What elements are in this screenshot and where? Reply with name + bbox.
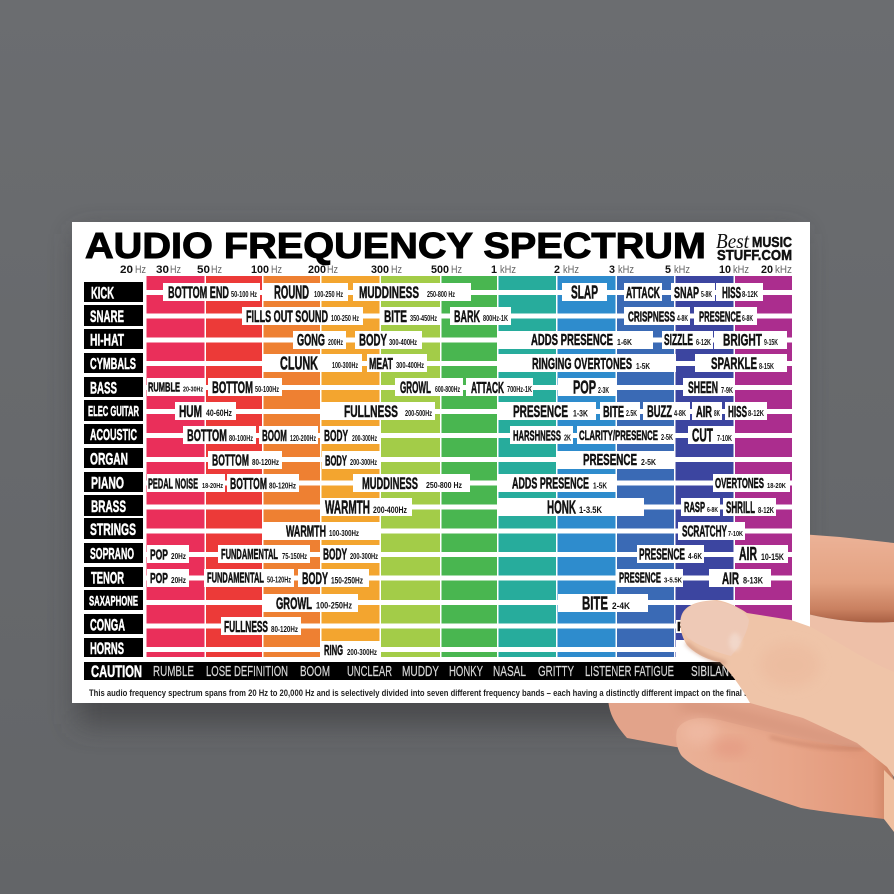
row: acoustic: 80-100Hz (229, 434, 253, 443)
row: conga: F (677, 619, 685, 634)
row: acoustic: BOOM (262, 428, 287, 445)
row: acoustic: BOTTOM (187, 426, 227, 445)
row: bass: RUMBLE (148, 380, 180, 394)
row: brass: WARMTH (325, 498, 370, 518)
row: tenor: 8-13K (743, 576, 763, 586)
row: electric guitar: 1-3K (573, 408, 588, 418)
row: acoustic: CLARITY/PRESENCE (579, 427, 658, 443)
row: brass: SHRILL (726, 498, 755, 517)
row: kick: 5-8K (701, 290, 712, 299)
row: kick: ATTACK (626, 285, 660, 302)
frequency axis labels: 100 (251, 264, 269, 276)
frequency axis labels: Hz (211, 264, 222, 276)
frequency axis labels: Hz (451, 264, 462, 276)
row: soprano: 75-150Hz (282, 552, 307, 561)
instrument labels: ACOUSTIC (90, 427, 137, 444)
instrument labels: KICK (91, 284, 114, 302)
row: cymbals: 300-400Hz (396, 361, 424, 370)
row: organ: BOTTOM (212, 452, 249, 470)
row: horns: RING (324, 642, 343, 659)
index finger behind (608, 695, 870, 770)
row: snare: BITE (384, 307, 407, 326)
row: conga (221, 617, 716, 636)
row: electric guitar: HISS (728, 404, 747, 421)
row: tenor (147, 569, 771, 588)
row: snare: 800Hz-1K (483, 314, 508, 323)
row: snare: PRESENCE (699, 308, 741, 326)
row: soprano: 200-300Hz (350, 552, 378, 561)
frequency axis labels: 5 (665, 264, 671, 276)
row: electric guitar: 4-8K (674, 409, 686, 418)
instrument labels: BASS (90, 378, 117, 398)
row: electric guitar: BUZZ (647, 402, 672, 421)
row: cymbals: 1-5K (636, 361, 651, 371)
row: brass: 6-8K (707, 505, 718, 514)
frequency axis labels: kHz (618, 264, 634, 276)
title: AUDIO FREQUENCY SPECTRUM (85, 225, 706, 266)
row: snare: 100-250 Hz (331, 314, 359, 323)
row: piano: 18-20K (767, 481, 786, 490)
row: soprano: PRESENCE (639, 546, 685, 564)
card (72, 222, 810, 703)
row: electric guitar: HUM (179, 402, 202, 421)
frequency axis labels: kHz (563, 264, 579, 276)
frequency axis labels: kHz (733, 264, 749, 276)
row: organ: 80-120Hz (252, 458, 279, 467)
row: soprano: FUNDAMENTAL (221, 546, 278, 563)
instrument labels: ELEC GUITAR (88, 404, 139, 420)
row: strings: WARMTH (286, 524, 326, 540)
row: saxaphone: 2-4K (612, 601, 630, 612)
row: hi-hat: 1-6K (617, 337, 633, 347)
row: piano: BOTTOM (230, 476, 267, 493)
row: acoustic: BODY (324, 428, 348, 445)
row: piano: 18-20Hz (202, 483, 223, 490)
row: electric guitar (175, 402, 767, 421)
row: bass: SHEEN (688, 378, 718, 397)
row: soprano: 20Hz (171, 552, 186, 561)
row: tenor: AIR (722, 569, 739, 588)
row: kick: MUDDINESS (359, 283, 419, 302)
row: electric guitar: 8-12K (748, 409, 764, 418)
row: brass: 200-400Hz (373, 505, 407, 515)
lower finger (676, 718, 894, 830)
row: piano: PEDAL NOISE (148, 476, 198, 492)
frequency axis labels: 20 (761, 264, 773, 276)
row: soprano: POP (150, 546, 168, 564)
row: bass: 2-3K (598, 386, 609, 395)
row: acoustic: HARSHNESS (513, 428, 561, 444)
caution bar: UNCLEAR (347, 663, 392, 680)
row: snare: 4-8K (677, 314, 688, 323)
row: organ: BODY (325, 452, 347, 470)
row: electric guitar: 2.5K (626, 409, 637, 418)
row: acoustic: 2-5K (661, 433, 673, 442)
caution bar: GRITTY (538, 663, 574, 680)
row: hi-hat: SIZZLE (664, 332, 693, 349)
caution bar: LOSE DEFINITION (206, 663, 288, 680)
spectrum colour bands (146, 276, 792, 657)
row: electric guitar: 8K (714, 409, 720, 418)
row: electric guitar: FULLNESS (344, 402, 398, 421)
row: tenor: POP (150, 570, 168, 587)
row: acoustic: CUT (692, 426, 713, 446)
instrument labels: TENOR (91, 568, 124, 588)
caution bar: LISTENER FATIGUE (585, 663, 674, 680)
row: cymbals: MEAT (369, 356, 393, 373)
frequency axis labels: 50 (197, 264, 210, 276)
row: electric guitar: BITE (603, 404, 624, 421)
instrument labels: SAXAPHONE (89, 592, 138, 608)
row: strings: 7-10K (728, 529, 743, 538)
row: kick: HISS (722, 285, 741, 302)
frequency axis labels: Hz (391, 264, 402, 276)
caution bar: CAUTION (91, 662, 142, 681)
instrument labels (84, 282, 143, 658)
frequency axis labels: kHz (775, 264, 792, 276)
row: piano: 250-800 Hz (426, 481, 462, 490)
row: bass (147, 378, 735, 398)
frequency axis labels: 1 (491, 264, 497, 276)
second finger top (800, 612, 894, 700)
hand behind the card (608, 534, 894, 832)
row: soprano: AIR (739, 544, 757, 564)
row: hi-hat (293, 330, 787, 350)
frequency axis labels: 30 (156, 264, 169, 276)
row: snare: 350-450Hz (410, 314, 437, 323)
caution bar: BOOM (300, 663, 330, 680)
row: organ: PRESENCE (583, 452, 637, 469)
frequency axis labels: Hz (271, 264, 282, 276)
caution bar: NASAL (493, 663, 526, 680)
row: horns: 200-300Hz (347, 648, 377, 657)
row: kick: 250-800 Hz (427, 290, 455, 299)
instrument labels: PIANO (91, 474, 124, 492)
row: hi-hat: 6-12K (696, 338, 711, 347)
row: hi-hat: 200Hz (328, 338, 343, 347)
row: strings: 100-300Hz (329, 529, 359, 538)
row: snare: FILLS OUT SOUND (246, 307, 328, 326)
row: kick: 50-100 Hz (231, 290, 257, 299)
frequency axis labels: Hz (170, 264, 181, 276)
row: piano: ADDS PRESENCE (512, 476, 589, 492)
row: piano: MUDDINESS (362, 474, 418, 493)
footnote: This audio frequency spectrum spans from 20 Hz to 20,000 Hz and is selectively divided into seven different frequency bands – each having a distinctly different impact on the final sound (89, 688, 767, 698)
instrument labels: CONGA (90, 616, 125, 634)
thumb over the card (680, 600, 894, 777)
instrument labels: SOPRANO (90, 546, 134, 563)
frequency axis labels: 2 (554, 264, 560, 276)
row: acoustic: 2K (564, 434, 571, 442)
frequency axis labels: Hz (135, 264, 146, 276)
row: acoustic: 120-200Hz (290, 434, 316, 443)
row: soprano: 10-15K (761, 552, 784, 562)
row: piano: 1-5K (593, 480, 608, 490)
row: conga: FULLNESS (224, 619, 268, 636)
upper finger (800, 534, 894, 623)
frequency axis labels: kHz (674, 264, 690, 276)
instrument labels: STRINGS (90, 520, 136, 539)
row: saxaphone (263, 594, 648, 614)
row: piano (147, 474, 790, 493)
caution bar: HONKY (449, 663, 483, 680)
row: piano: OVERTONES (715, 475, 764, 492)
row: bass: 700Hz-1K (507, 385, 532, 394)
row: brass: RASP (684, 500, 705, 516)
row: electric guitar: 40-60Hz (206, 408, 232, 418)
frequency axis labels: Hz (327, 264, 338, 276)
row: kick: SNAP (674, 285, 699, 302)
row: brass: 1-3.5K (579, 505, 602, 515)
instrument labels: HORNS (90, 639, 124, 658)
row: hi-hat: ADDS PRESENCE (531, 332, 613, 349)
row: bass: 600-800Hz (435, 385, 460, 394)
row: kick: ROUND (274, 282, 309, 302)
frequency axis labels: 20 (120, 264, 133, 276)
row: bass: 20-30Hz (183, 386, 203, 394)
row: bass: 50-100Hz (255, 385, 279, 394)
row: hi-hat: 300-400Hz (389, 338, 417, 347)
row: cymbals: 8-15K (759, 362, 774, 371)
frequency axis labels: 3 (609, 264, 615, 276)
instrument labels: CYMBALS (90, 356, 136, 373)
row: organ: 200-300Hz (350, 458, 377, 467)
row: kick: SLAP (571, 282, 598, 302)
row: tenor: FUNDAMENTAL (207, 570, 264, 586)
instrument labels: BRASS (91, 497, 126, 516)
brand logo: Best (716, 229, 750, 253)
brand logo: STUFF.COM (717, 247, 792, 264)
row: brass: 8-12K (758, 506, 774, 515)
row: horns (321, 640, 736, 659)
row: electric guitar: 200-500Hz (405, 409, 432, 418)
row divider lines (146, 290, 792, 652)
row: saxaphone: GROWL (276, 594, 312, 613)
caution bar: SIBILANT (691, 663, 735, 680)
row: strings (263, 522, 745, 540)
row: brass: HONK (547, 498, 576, 518)
row: hi-hat: BRIGHT (723, 330, 762, 350)
row: tenor: 3-5.5K (664, 576, 682, 584)
row: acoustic: 200-300Hz (352, 434, 377, 443)
row: hi-hat: BODY (359, 330, 387, 350)
row: hi-hat: GONG (297, 330, 325, 350)
row: bass: GROWL (400, 378, 431, 397)
row: cymbals: CLUNK (280, 354, 318, 374)
row: kick: 100-250 Hz (314, 290, 343, 299)
row: tenor: PRESENCE (619, 570, 661, 586)
caution bar (84, 662, 792, 681)
row: tenor: 20Hz (171, 576, 186, 585)
row: kick: BOTTOM END (168, 283, 229, 302)
row: snare (242, 307, 757, 326)
row: cymbals: 100-300Hz (332, 361, 358, 370)
row: cymbals: RINGING OVERTONES (532, 356, 632, 373)
frequency axis labels: kHz (500, 264, 516, 276)
frequency axis labels: 500 (431, 264, 449, 276)
row: snare: CRISPNESS (628, 308, 675, 326)
instrument labels: SNARE (90, 307, 124, 326)
row: snare: BARK (454, 307, 480, 326)
row: soprano: BODY (323, 546, 347, 564)
row: snare: 6-8K (742, 314, 753, 323)
row: electric guitar: AIR (696, 404, 712, 421)
row: conga: 80-120Hz (271, 625, 298, 634)
row: acoustic: 7-10K (717, 434, 732, 443)
row: organ (208, 451, 675, 470)
row: cymbals (263, 354, 787, 374)
row: cymbals: SPARKLE (711, 354, 757, 373)
row: bass: 7-9K (721, 386, 733, 395)
row: tenor: 50-120Hz (267, 576, 291, 584)
instrument labels: HI-HAT (90, 330, 124, 350)
row: saxaphone: BITE (582, 594, 608, 614)
row: tenor: 150-250Hz (331, 576, 363, 586)
instrument labels: ORGAN (90, 450, 128, 468)
row: soprano (147, 544, 788, 564)
brand logo (716, 229, 792, 264)
thumbnail (681, 601, 749, 656)
caution bar: MUDDY (402, 663, 439, 680)
frequency axis labels: 300 (371, 264, 389, 276)
row: electric guitar: PRESENCE (513, 402, 568, 421)
frequency axis labels: 200 (308, 264, 326, 276)
row: bass: POP (573, 378, 596, 398)
frequency axis labels: 10 (719, 264, 731, 276)
row: soprano: 4-6K (688, 552, 702, 561)
row: strings: SCRATCHY (682, 524, 727, 540)
row: organ: 2-5K (641, 457, 657, 467)
row: piano: 80-120Hz (269, 482, 296, 490)
brand logo: MUSIC (752, 234, 792, 251)
caution bar: RUMBLE (153, 663, 194, 680)
row: acoustic (183, 426, 735, 446)
row: hi-hat: 9-15K (764, 338, 778, 347)
row: bass: ATTACK (471, 380, 504, 397)
frequency axis labels (120, 264, 792, 276)
row: saxaphone: 100-250Hz (316, 600, 352, 610)
row: kick (163, 282, 763, 302)
row: kick: 8-12K (742, 290, 758, 299)
row: brass (321, 498, 776, 518)
card shadow (78, 234, 798, 724)
row: bass: BOTTOM (212, 378, 253, 397)
row: tenor: BODY (302, 569, 328, 588)
